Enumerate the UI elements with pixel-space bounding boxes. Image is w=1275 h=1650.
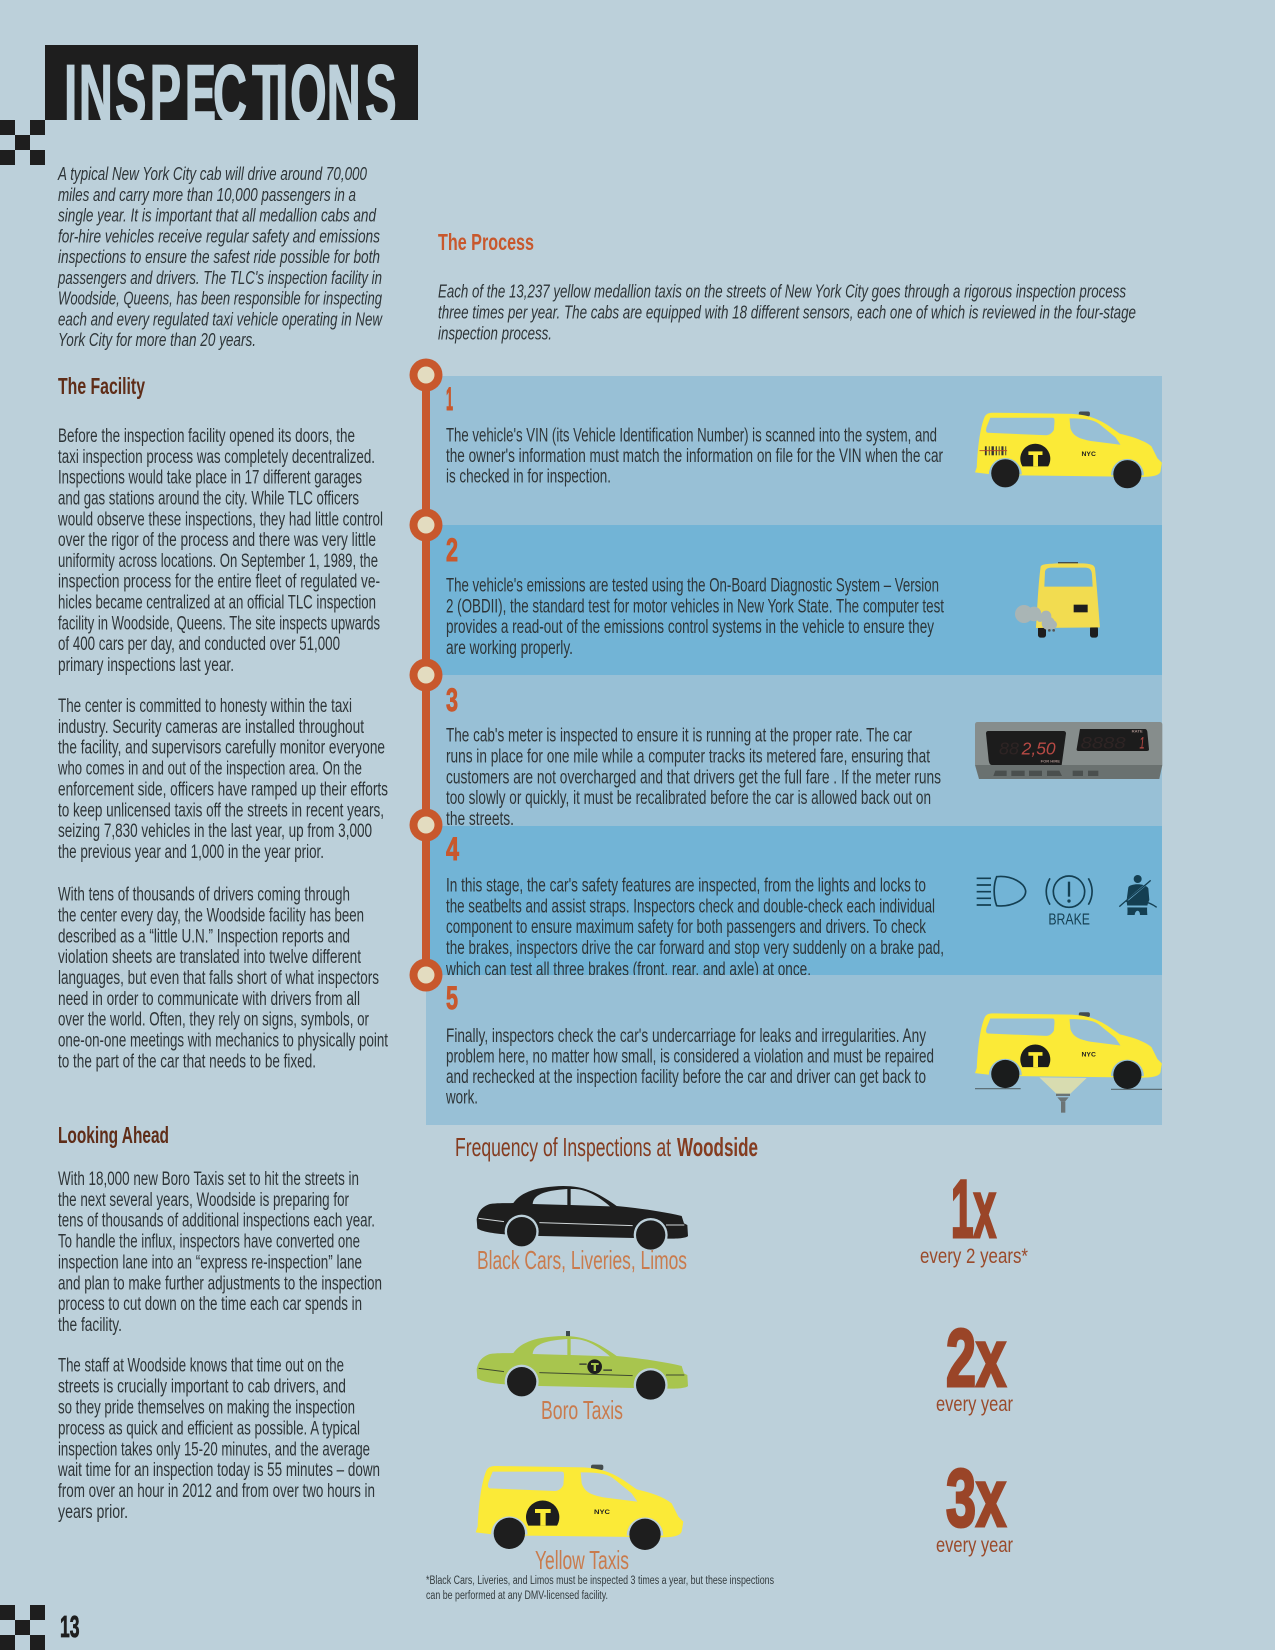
panel: step 3 xyxy=(426,675,1162,830)
step 2 text: 2 (OBDII), the standard test for motor vehicles in New York State. The computer test xyxy=(446,596,945,617)
text block: facility paragraph 1: would observe these inspections, they had little control xyxy=(57,509,383,530)
text block: intro xyxy=(57,163,383,350)
icon: taxi on lift with undercarriage funnel xyxy=(975,1012,1162,1113)
text block: facility paragraph 1: and gas stations around the city. While TLC officers xyxy=(58,488,359,510)
icon: bottom checker pattern xyxy=(0,1605,45,1650)
label: boro taxis: Boro Taxis xyxy=(541,1395,623,1425)
text block: facility paragraph 3: violation sheets are translated into twelve different xyxy=(58,947,362,968)
text block: facility paragraph 1: facility in Woodside, Queens. The site inspects upwards xyxy=(58,613,380,634)
label: black cars: Black Cars, Liveries, Limos xyxy=(477,1245,687,1275)
text block: facility paragraph 3: need in order to communicate with drivers from all xyxy=(58,989,360,1010)
step 3 text: the streets. xyxy=(446,809,514,830)
text block: facility paragraph 2: industry. Security cameras are installed throughout xyxy=(58,717,365,738)
icon: taxi on lift with undercarriage funnel: NYC xyxy=(1082,1053,1097,1059)
step 2 number: 2 xyxy=(446,532,458,568)
text block: facility paragraph 1: taxi inspection process was completely decentralized. xyxy=(58,447,375,468)
text block: looking ahead paragraph 1: the facility. xyxy=(58,1315,122,1336)
text block: looking ahead paragraph 1: With 18,000 new Boro Taxis set to hit the streets in xyxy=(58,1169,359,1190)
text block: looking ahead paragraph 1: the next several years, Woodside is preparing for xyxy=(58,1190,349,1211)
step 5 text: and rechecked at the inspection facility before the car and driver can get back to xyxy=(446,1067,926,1088)
text block: facility paragraph 3 xyxy=(58,885,388,1072)
text block: facility paragraph 2: The center is committed to honesty within the taxi xyxy=(58,696,352,717)
heading: frequency of inspections: Woodside xyxy=(677,1132,758,1162)
text block: facility paragraph 1: uniformity across locations. On September 1, 1989, the xyxy=(58,551,378,572)
title xyxy=(45,45,418,120)
icon: black car xyxy=(477,1186,688,1252)
step 4 text: which can test all three brakes (front, rear, and axle) at once. xyxy=(445,960,811,980)
text block: looking ahead paragraph 1: inspection lane into an “express re-inspection” lane xyxy=(58,1252,362,1273)
text block: looking ahead paragraph 2: wait time for an inspection today is 55 minutes – down xyxy=(57,1460,380,1481)
icons: headlight, brake, seatbelt xyxy=(977,875,1157,928)
icon: yellow taxi xyxy=(476,1465,683,1550)
panel: step 1 xyxy=(426,376,1162,525)
text block: facility paragraph 3: With tens of thousands of drivers coming through xyxy=(58,885,350,906)
icon: taxi meter: 8888 xyxy=(1081,733,1127,752)
step 3 text xyxy=(446,726,941,830)
text block: process intro xyxy=(438,280,1136,344)
step 1 text xyxy=(446,426,943,487)
text block: intro: A typical New York City cab will drive around 70,000 xyxy=(57,163,368,184)
step 5 number: 5 xyxy=(446,980,458,1016)
text block: facility paragraph 2: who comes in and out of the inspection area. On the xyxy=(57,759,362,780)
icon: taxi meter: FOR HIRE xyxy=(1041,759,1061,763)
text block: facility paragraph 1: Before the inspection facility opened its doors, the xyxy=(58,426,355,447)
text block: looking ahead paragraph 1: and plan to make further adjustments to the inspection xyxy=(58,1273,382,1294)
title: INSPECTIONS xyxy=(64,49,397,139)
stat: 3x every year: 3x xyxy=(946,1453,1006,1544)
text block: facility paragraph 3: the center every day, the Woodside facility has been xyxy=(58,906,364,926)
text block: looking ahead paragraph 2: The staff at Woodside knows that time out on the xyxy=(58,1356,344,1377)
panel: step 5 xyxy=(426,975,1162,1125)
text block: looking ahead paragraph 2: years prior. xyxy=(58,1502,128,1523)
label: yellow taxis: Yellow Taxis xyxy=(535,1545,629,1575)
icon: taxi meter: 1 xyxy=(1139,733,1145,752)
text block: intro: passengers and drivers. The TLC's inspection facility in xyxy=(57,267,382,288)
text block: facility paragraph 2: to keep unlicensed taxis off the streets in recent years, xyxy=(58,800,384,821)
text block: looking ahead paragraph 1 xyxy=(58,1169,382,1336)
stat: 1x every 2 years xyxy=(920,1164,1028,1268)
panel: step 4 xyxy=(426,826,1162,980)
text block: facility paragraph 1: Inspections would take place in 17 different garages xyxy=(58,468,362,489)
text block: facility paragraph 1: inspection process for the entire fleet of regulated ve- xyxy=(58,572,380,593)
text block: facility paragraph 1: over the rigor of the process and there was very little xyxy=(58,530,376,551)
step 1 text: is checked in for inspection. xyxy=(446,466,611,487)
text block: looking ahead paragraph 2: streets is crucially important to cab drivers, and xyxy=(58,1377,346,1398)
icon: taxi meter: RATE xyxy=(1132,730,1143,734)
step 3 number: 3 xyxy=(446,682,458,718)
step 4 text xyxy=(445,876,944,980)
text block: facility paragraph 1: primary inspections last year. xyxy=(58,655,234,676)
icon: yellow taxi with VIN barcode xyxy=(975,412,1162,488)
footnote xyxy=(426,1575,774,1602)
text block: looking ahead paragraph 1: process to cut down on the time each car spends in xyxy=(58,1294,362,1315)
step 5 text: problem here, no matter how small, is considered a violation and must be repaired xyxy=(446,1046,934,1067)
icon: taxi meter: 88 xyxy=(999,738,1019,758)
step 3 text: too slowly or quickly, it must be recalibrated before the car is allowed back out on xyxy=(446,788,931,809)
step 3 text: The cab's meter is inspected to ensure it is running at the proper rate. The car xyxy=(446,726,912,747)
text block: facility paragraph 2: seizing 7,830 vehicles in the last year, up from 3,000 xyxy=(58,821,372,842)
icon: brake warning: BRAKE xyxy=(1048,911,1090,928)
step 4 text: In this stage, the car's safety features are inspected, from the lights and locks to xyxy=(446,876,926,897)
timeline with markers xyxy=(410,358,442,992)
text block: facility paragraph 3: to the part of the car that needs to be fixed. xyxy=(58,1051,316,1072)
text block: facility paragraph 3: one-on-one meetings with mechanics to physically point xyxy=(58,1030,388,1052)
icon: top checker pattern xyxy=(0,120,45,165)
stat: 2x every year: every year xyxy=(936,1392,1013,1416)
heading: frequency of inspections: Frequency of Inspections at xyxy=(455,1132,672,1162)
text block: intro: miles and carry more than 10,000 passengers in a xyxy=(58,184,356,205)
icon: taxi meter xyxy=(975,722,1162,779)
text block: facility paragraph 2: the facility, and supervisors carefully monitor everyone xyxy=(58,738,385,759)
text block: intro: inspections to ensure the safest ride possible for both xyxy=(58,246,380,267)
step 5 text: Finally, inspectors check the car's undercarriage for leaks and irregularities. Any xyxy=(446,1026,926,1047)
stat: 2x every year: 2x xyxy=(946,1313,1006,1404)
icon: boro taxi xyxy=(477,1331,688,1402)
text block: facility paragraph 3: over the world. Often, they rely on signs, symbols, or xyxy=(58,1010,369,1031)
step 1 text: The vehicle's VIN (its Vehicle Identification Number) is scanned into the system, and xyxy=(446,426,937,447)
step 2 text: The vehicle's emissions are tested using the On-Board Diagnostic System – Version xyxy=(446,576,939,597)
text block: intro: single year. It is important that all medallion cabs and xyxy=(58,204,377,226)
text block: looking ahead paragraph 2: process as quick and efficient as possible. A typical xyxy=(58,1418,360,1439)
step 4 text: component to ensure maximum safety for both passengers and drivers. To check xyxy=(446,917,926,938)
step 4 text: the brakes, inspectors drive the car forward and stop very suddenly on a brake pad, xyxy=(446,938,944,959)
step 4 text: the seatbelts and assist straps. Inspectors check and double-check each individual xyxy=(446,896,935,917)
text block: intro: York City for more than 20 years. xyxy=(58,329,256,350)
stat: 2x every year xyxy=(936,1313,1013,1416)
footnote: can be performed at any DMV-licensed facility. xyxy=(426,1590,608,1602)
step 3 text: customers are not overcharged and that drivers get the full fare . If the meter runs xyxy=(446,767,941,788)
icon: yellow taxi: NYC xyxy=(594,1509,610,1516)
text block: intro: each and every regulated taxi vehicle operating in New xyxy=(58,308,383,329)
heading: The Process: The Process xyxy=(438,229,534,255)
text block: facility paragraph 2: enforcement side, officers have ramped up their efforts xyxy=(58,779,388,800)
stat: 3x every year xyxy=(936,1453,1013,1557)
step 1 text: the owner's information must match the information on file for the VIN when the car xyxy=(446,446,943,467)
text block: looking ahead paragraph 2 xyxy=(57,1356,380,1523)
text block: facility paragraph 3: languages, but even that falls short of what inspectors xyxy=(58,968,379,989)
heading: Looking Ahead: Looking Ahead xyxy=(58,1122,169,1148)
text block: intro: for-hire vehicles receive regular safety and emissions xyxy=(58,225,380,246)
icon: brake warning xyxy=(1046,876,1092,928)
panel: step 2 xyxy=(426,525,1162,675)
footnote: *Black Cars, Liveries, and Limos must be inspected 3 times a year, but these inspections xyxy=(426,1575,774,1587)
step 4 number: 4 xyxy=(446,831,459,867)
text block: facility paragraph 1: hicles became centralized at an official TLC inspection xyxy=(58,592,376,614)
text block: intro: Woodside, Queens, has been responsible for inspecting xyxy=(58,288,383,308)
text block: facility paragraph 1 xyxy=(57,426,383,676)
step 2 text: are working properly. xyxy=(446,638,573,659)
text block: process intro: inspection process. xyxy=(438,322,552,344)
text block: facility paragraph 2: the previous year and 1,000 in the year prior. xyxy=(58,842,324,863)
step 5 text xyxy=(445,1026,934,1108)
icon: headlight xyxy=(977,876,1026,906)
text block: looking ahead paragraph 2: so they pride themselves on making the inspection xyxy=(58,1398,355,1418)
text block: facility paragraph 2 xyxy=(57,696,388,863)
text block: facility paragraph 1: of 400 cars per day, and conducted over 51,000 xyxy=(58,634,340,655)
icon: seatbelt xyxy=(1119,875,1157,915)
icon: taxi meter: 2,50 xyxy=(1021,738,1056,758)
text block: looking ahead paragraph 1: To handle the influx, inspectors have converted one xyxy=(58,1232,360,1253)
step 5 text: work. xyxy=(445,1088,478,1108)
text block: looking ahead paragraph 2: inspection takes only 15-20 minutes, and the average xyxy=(58,1439,370,1460)
step 2 text: provides a read-out of the emissions control systems in the vehicle to ensure they xyxy=(446,617,934,638)
text block: looking ahead paragraph 2: from over an hour in 2012 and from over two hours in xyxy=(58,1481,375,1502)
stat: 3x every year: every year xyxy=(936,1533,1013,1557)
step 2 text xyxy=(446,576,945,659)
stat: 1x every 2 years: 1x xyxy=(951,1164,996,1255)
text block: looking ahead paragraph 1: tens of thousands of additional inspections each year. xyxy=(58,1211,375,1232)
text block: facility paragraph 3: described as a “little U.N.” Inspection reports and xyxy=(58,926,350,947)
stat: 1x every 2 years: every 2 years* xyxy=(920,1244,1028,1268)
page number: 13 xyxy=(60,1609,80,1644)
heading: The Facility: The Facility xyxy=(58,373,145,399)
panel: step 1: 1 xyxy=(446,381,453,417)
step 3 text: runs in place for one mile while a computer tracks its metered fare, ensuring that xyxy=(446,746,931,768)
icon: taxi rear with exhaust smoke xyxy=(1015,562,1100,638)
icon: yellow taxi with VIN barcode: NYC xyxy=(1082,452,1097,458)
